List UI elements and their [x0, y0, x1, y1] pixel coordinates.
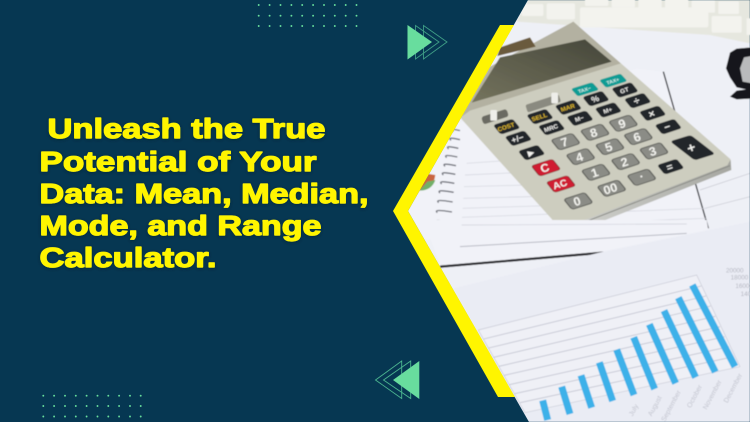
pie chart fragment: [419, 173, 435, 191]
calculator keys: GT: [619, 86, 630, 96]
photo: calculator on paperwork: [400, 0, 750, 422]
calculator keys: TAX+: [606, 77, 620, 86]
calculator keys: 8: [588, 125, 599, 141]
calculator keys: MAR: [560, 103, 576, 114]
dot grid: bottom: [42, 395, 142, 417]
calculator keys: ×: [647, 109, 657, 121]
title: Potential of Your: [40, 146, 317, 177]
calculator: [460, 22, 731, 235]
sheet bar chart: August: [647, 395, 664, 418]
calculator keys: MRC: [543, 123, 560, 134]
sheet bar chart: 20000: [726, 268, 744, 275]
title: Mode, and Range: [40, 210, 322, 241]
sheet bar chart: December: [723, 372, 745, 404]
title: [40, 113, 368, 273]
yellow chevron frame: [393, 25, 515, 397]
calculator keys: TAX−: [578, 86, 592, 95]
calculator keys: M−: [574, 115, 585, 124]
dot grid: top: [258, 4, 357, 27]
calculator keys: SELL: [531, 112, 549, 123]
sheet bar chart: July: [628, 403, 640, 418]
glasses: [726, 47, 750, 99]
calculator keys: 3: [647, 144, 658, 159]
sheet bar chart: [478, 268, 750, 422]
calculator keys: %: [590, 93, 601, 105]
calculator keys: 7: [559, 135, 570, 150]
sheet bar chart: 18000: [731, 274, 749, 281]
sheet bar chart: September: [661, 389, 683, 422]
title: Calculator.: [40, 242, 217, 273]
calculator keys: 2: [619, 155, 630, 170]
calculator keys: 1: [589, 165, 600, 181]
sheet bar chart: November: [702, 379, 724, 411]
calculator keys: ÷: [632, 96, 642, 108]
calculator keys: C: [539, 161, 552, 176]
calculator display: [461, 22, 621, 117]
icon: top right-pointing triangles: [408, 25, 447, 60]
calculator keys: [493, 74, 715, 210]
paper desk surface: [400, 0, 750, 422]
icon: bottom left-pointing triangles: [376, 361, 419, 399]
calculator keys: AC: [552, 178, 569, 192]
calculator keys: M+: [603, 106, 614, 116]
chart sheet: [589, 251, 604, 256]
notebook page: [420, 71, 710, 229]
right paper lines: [700, 173, 750, 208]
calculator keys: 0: [572, 194, 583, 209]
calculator keys: 4: [574, 150, 585, 165]
calculator keys: ▶: [526, 148, 536, 158]
calculator keys: 00: [602, 180, 619, 198]
sliders: [481, 109, 509, 125]
calculator keys: .: [637, 167, 644, 181]
calculator keys: =: [665, 162, 675, 174]
calculator keys: −: [663, 122, 672, 134]
calculator keys: 9: [617, 116, 628, 132]
calculator keys: COST: [497, 122, 516, 134]
calculator keys: 6: [632, 130, 643, 145]
keyboard: [517, 0, 750, 43]
title: Unleash the True: [48, 113, 326, 144]
notebook lower edge: [423, 220, 708, 267]
calculator keys: 5: [603, 140, 614, 155]
notebook coil: [435, 128, 460, 220]
title: Data: Mean, Median,: [40, 178, 368, 209]
sheet bar chart: October: [686, 383, 704, 409]
calculator keys: +/−: [510, 132, 525, 145]
calculator keys: +: [685, 140, 698, 156]
